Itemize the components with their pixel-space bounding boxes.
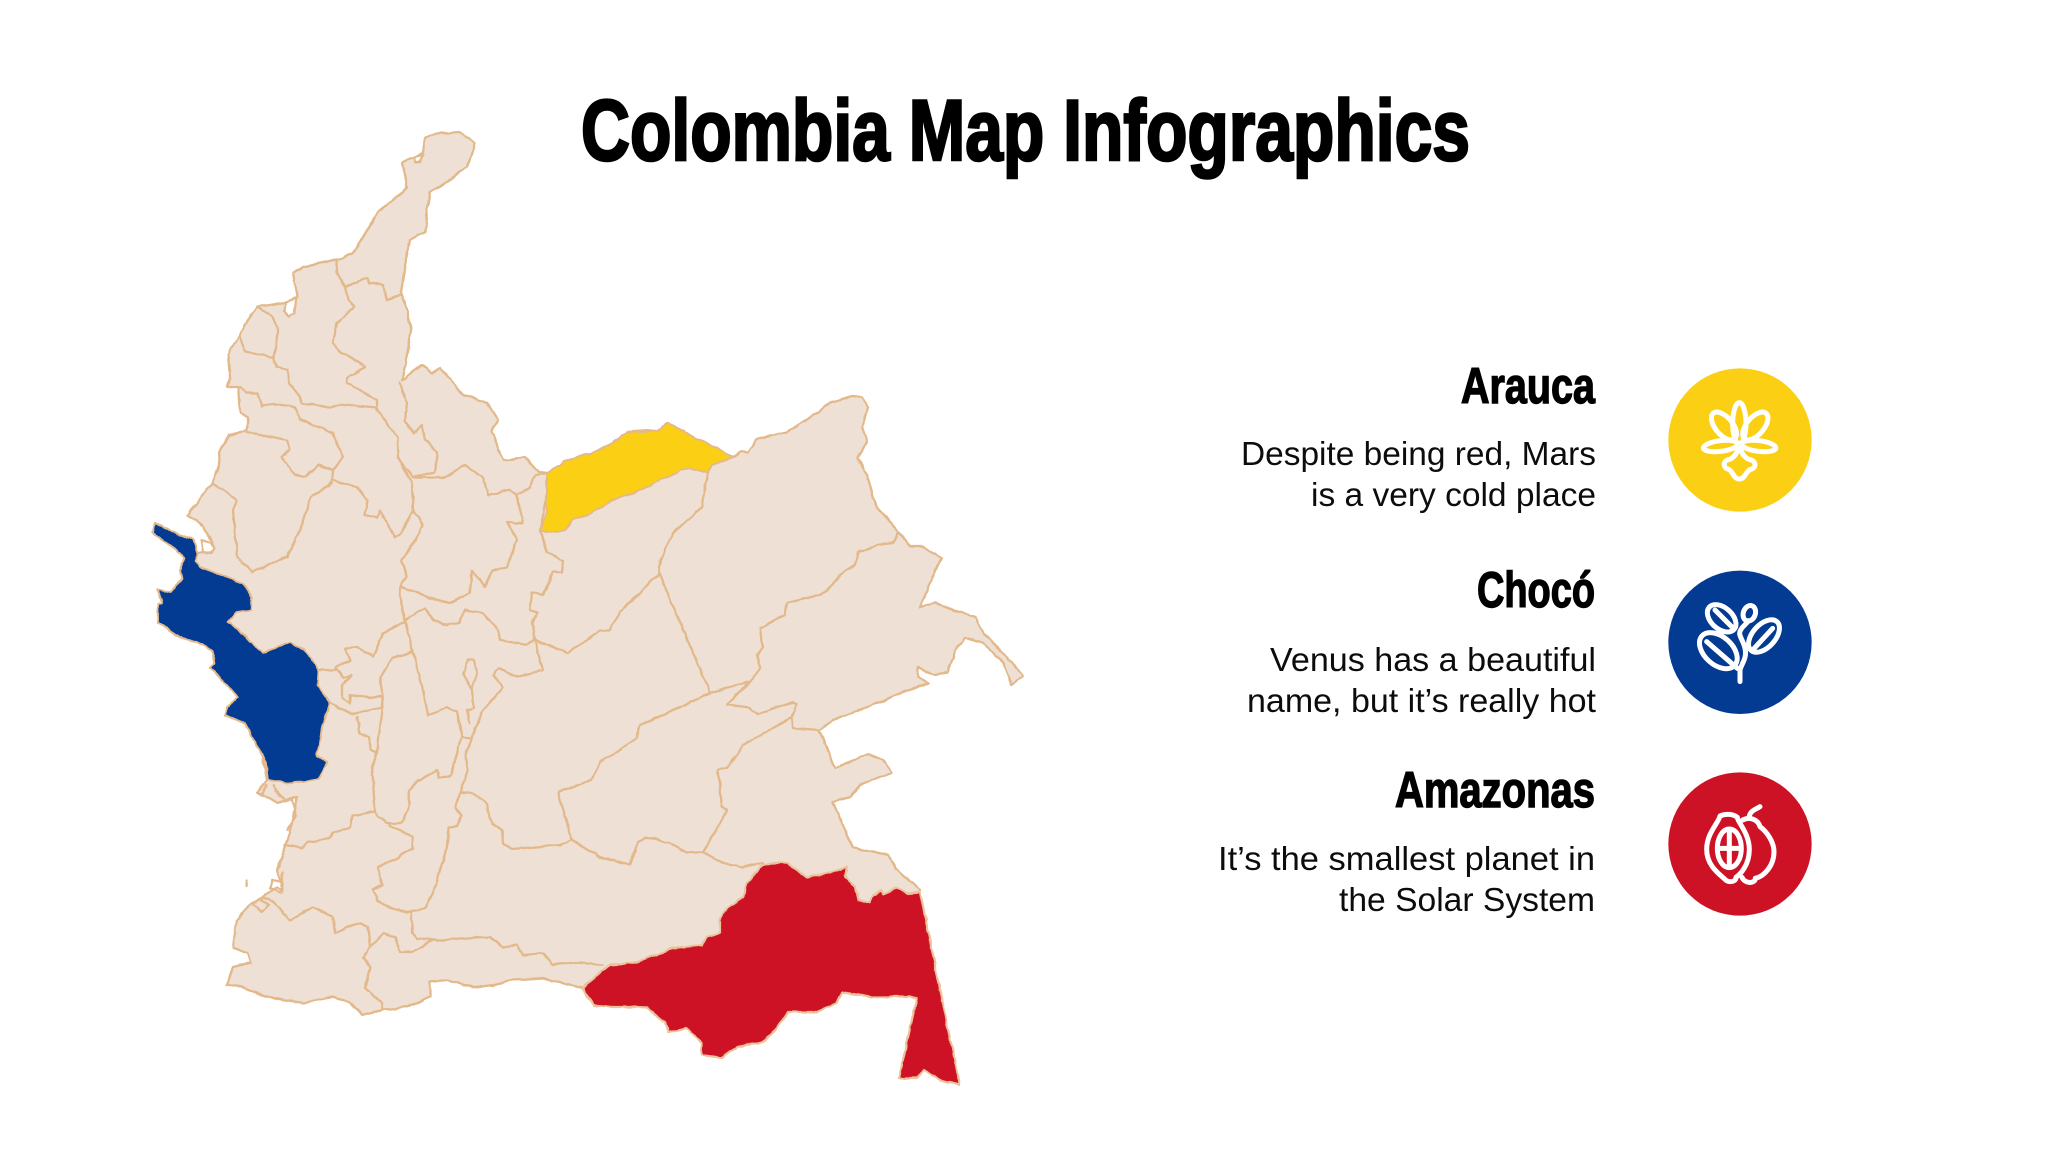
icon: red circle with cacao fruit	[1668, 772, 1812, 916]
description: Arauca: is a very cold place	[1311, 476, 1596, 513]
icon: yellow circle with flower	[1668, 368, 1812, 512]
lagoon cut-outs	[202, 155, 423, 553]
icon: blue circle with plant	[1668, 571, 1812, 714]
description: Chocó: Venus has a beautiful	[1270, 641, 1596, 678]
item: Chocó	[1247, 562, 1812, 719]
region: Amazonas (red)	[582, 863, 960, 1085]
item: Amazonas	[1218, 762, 1812, 918]
description: Arauca: Despite being red, Mars	[1241, 435, 1596, 472]
heading: Chocó: Chocó	[1477, 562, 1595, 618]
map of Colombia	[153, 132, 1023, 1085]
region: Chocó (blue)	[153, 523, 330, 783]
item: Arauca	[1241, 358, 1812, 513]
title: Colombia Map Infographics	[581, 83, 1470, 179]
heading: Arauca: Arauca	[1461, 358, 1596, 414]
description: Amazonas: the Solar System	[1339, 881, 1595, 918]
region: Arauca (yellow)	[540, 423, 733, 533]
heading: Amazonas: Amazonas	[1395, 762, 1595, 818]
description: Chocó: name, but it’s really hot	[1247, 682, 1596, 719]
description: Amazonas: It’s the smallest planet in	[1218, 840, 1595, 877]
map base: all departments	[153, 132, 1023, 1015]
internal department borders	[212, 260, 898, 1010]
